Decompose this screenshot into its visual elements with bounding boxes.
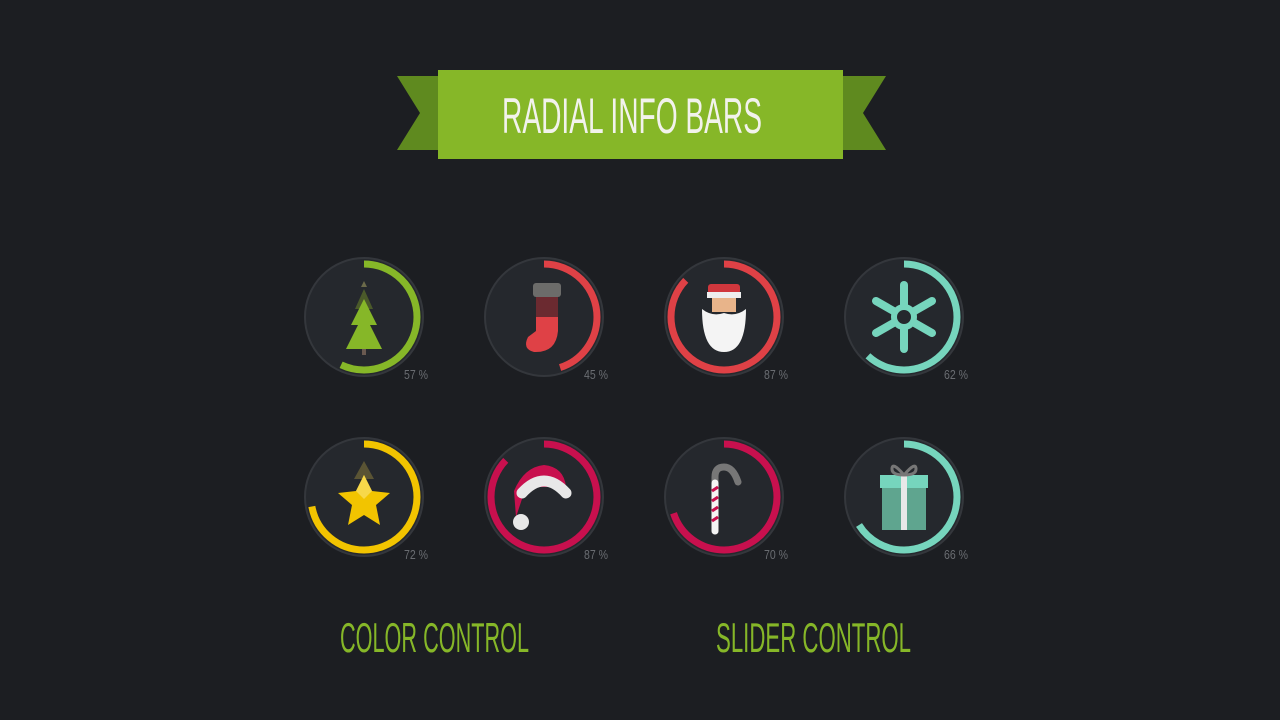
icon: star [338, 461, 390, 525]
icon: candy cane [712, 467, 738, 531]
label: color control: COLOR CONTROL [340, 614, 529, 661]
radial bar: candy cane 70% [665, 438, 788, 562]
radial bar: santa 87%: 87 % [764, 367, 788, 382]
icon: santa hat [513, 465, 566, 530]
label: slider control: SLIDER CONTROL [716, 614, 911, 661]
icon: tree [346, 281, 382, 355]
icon: santa [702, 284, 746, 352]
icon: stocking [526, 283, 561, 352]
icon: gift [880, 466, 928, 530]
radial bar: tree 57% [305, 258, 428, 382]
radial bar: gift 66%: 66 % [944, 547, 968, 562]
radial bar: stocking 45%: 45 % [584, 367, 608, 382]
radial bar: hat 87% [485, 438, 608, 562]
radial bar: snowflake 62%: 62 % [944, 367, 968, 382]
radial bar: snowflake 62% [845, 258, 968, 382]
title banner [397, 70, 886, 159]
radial bar: tree 57%: 57 % [404, 367, 428, 382]
radial bar: stocking 45% [485, 258, 608, 382]
radial bar: hat 87%: 87 % [584, 547, 608, 562]
radial bar: candy cane 70%: 70 % [764, 547, 788, 562]
title banner: RADIAL INFO BARS [502, 88, 762, 144]
icon: snowflake [876, 285, 932, 349]
radial bar: star 72% [305, 438, 428, 562]
radial bar: santa 87% [665, 258, 788, 382]
radial bar: star 72%: 72 % [404, 547, 428, 562]
radial bar: gift 66% [845, 438, 968, 562]
